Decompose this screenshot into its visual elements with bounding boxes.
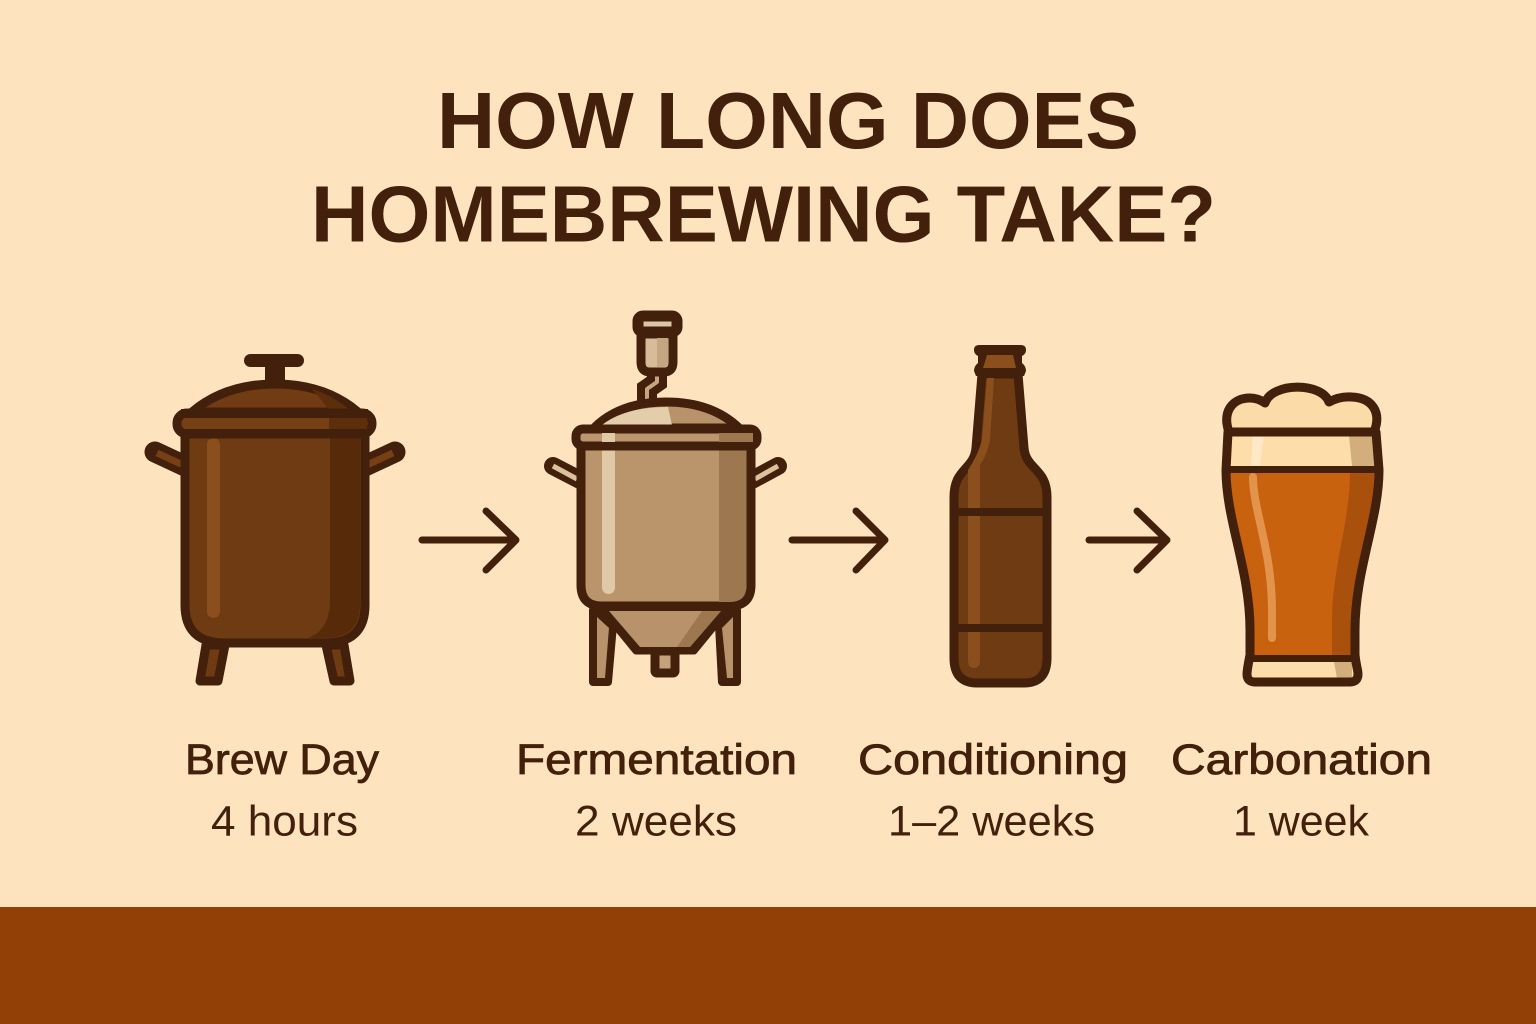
label: conditioning: 1–2 weeks: [888, 798, 1095, 846]
title: [311, 76, 1216, 258]
icon: fermenter: [553, 316, 778, 682]
arrow: brew day to fermentation: [422, 511, 516, 570]
label: fermentation: Fermentation: [516, 736, 797, 784]
label: conditioning: [858, 736, 1128, 846]
label: fermentation: 2 weeks: [575, 798, 737, 846]
icon: beer glass: [1226, 387, 1379, 682]
arrow: conditioning to carbonation: [1089, 511, 1167, 570]
icon: beer bottle: [950, 345, 1050, 683]
footer band: [0, 907, 1536, 1024]
title: HOMEBREWING TAKE?: [311, 170, 1216, 258]
label: carbonation: Carbonation: [1171, 736, 1432, 784]
label: fermentation: [516, 736, 797, 846]
label: conditioning: Conditioning: [858, 736, 1128, 784]
label: brew day: Brew Day: [185, 736, 380, 784]
label: brew day: 4 hours: [211, 798, 358, 846]
label: brew day: [185, 736, 380, 846]
label: carbonation: 1 week: [1233, 798, 1369, 846]
label: carbonation: [1171, 736, 1432, 846]
title: HOW LONG DOES: [437, 76, 1139, 165]
icon: brew kettle: [155, 354, 395, 681]
arrow: fermentation to conditioning: [792, 511, 885, 570]
